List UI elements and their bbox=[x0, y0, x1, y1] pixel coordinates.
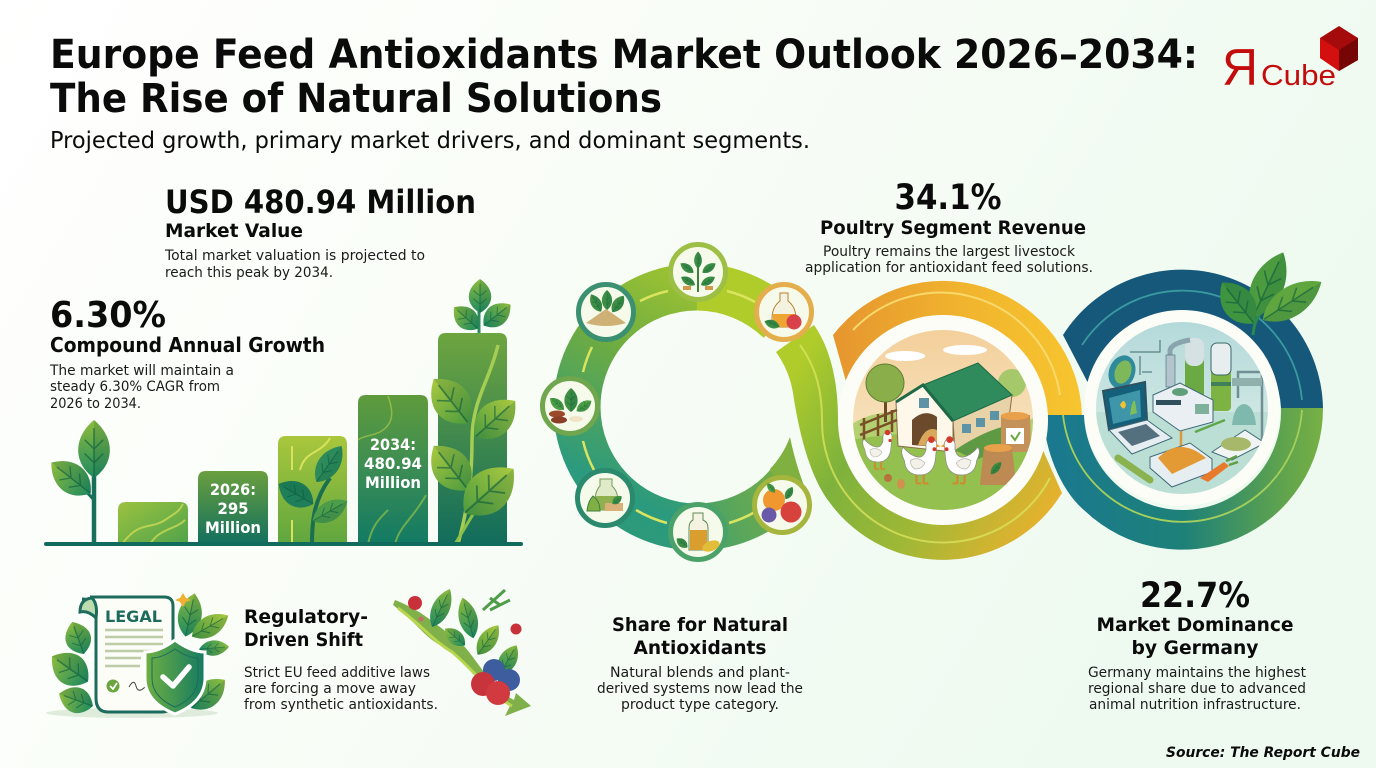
stat: CAGR: The market will maintain a bbox=[49, 363, 234, 379]
band: teal lower arc bbox=[1043, 408, 1323, 550]
bar chart: market growth bbox=[42, 279, 528, 546]
source note: Source: The Report Cube bbox=[1166, 745, 1360, 761]
icon node: fruits bbox=[754, 478, 810, 532]
bar 2034: 2034: bbox=[370, 435, 416, 454]
text: natural antioxidants share: derived systems now lead the bbox=[597, 681, 803, 697]
stat: CAGR: steady 6.30% CAGR from bbox=[50, 379, 220, 395]
icon node: herb top bbox=[670, 244, 726, 300]
text: regulatory shift: Driven Shift bbox=[244, 629, 363, 651]
text: natural antioxidants share: Natural blends and plant- bbox=[610, 665, 790, 681]
stat: Germany: 22.7% bbox=[1140, 576, 1250, 616]
illustration: poultry farm bbox=[853, 330, 1033, 510]
bar 2026: 295 bbox=[218, 499, 248, 518]
logo: RCube bbox=[1222, 26, 1358, 97]
icon: natural shift arrow with berries bbox=[393, 585, 531, 716]
band: dark blue arc bbox=[1063, 270, 1323, 408]
stat: CAGR: Compound Annual Growth bbox=[50, 333, 325, 357]
stat: market value: USD 480.94 Million bbox=[165, 183, 476, 221]
title: The Rise of Natural Solutions bbox=[50, 76, 662, 122]
stat: poultry: Poultry remains the largest livestock bbox=[823, 244, 1076, 260]
icon node: leaves and nuts bbox=[542, 378, 598, 434]
bar 2026: 2026: bbox=[210, 480, 256, 499]
text: natural antioxidants share: product type category. bbox=[621, 697, 779, 713]
icon: leaves on blue ring bbox=[1210, 246, 1329, 335]
bar 3 bbox=[273, 436, 352, 544]
text: natural antioxidants share bbox=[597, 614, 803, 713]
icon node: powder and leaves bbox=[578, 284, 634, 340]
stat: market value: reach this peak by 2034. bbox=[165, 265, 333, 281]
subtitle: Projected growth, primary market drivers, and dominant segments. bbox=[50, 128, 810, 154]
stat: market value: Total market valuation is projected to bbox=[164, 248, 425, 264]
band: S curve into poultry bbox=[776, 325, 1062, 560]
stat: poultry: application for antioxidant feed solutions. bbox=[805, 260, 1093, 276]
text: regulatory shift: are forcing a move away bbox=[244, 681, 416, 697]
text: regulatory shift: Strict EU feed additive laws bbox=[244, 665, 430, 681]
stat: CAGR: 2026 to 2034. bbox=[50, 396, 141, 412]
stat: Germany: Germany maintains the highest bbox=[1088, 665, 1306, 681]
text: natural antioxidants share: Antioxidants bbox=[634, 637, 766, 659]
illustration: feed lab bbox=[1096, 322, 1268, 494]
icon: legal document with shield bbox=[43, 591, 233, 718]
bar 2034: 480.94 bbox=[364, 454, 422, 473]
infinity loop diagram bbox=[577, 246, 1329, 560]
stat: CAGR: 6.30% bbox=[50, 295, 166, 336]
stat: Germany bbox=[1088, 576, 1306, 713]
icon node: oil and fruit bbox=[756, 284, 812, 340]
stat: Germany: regional share due to advanced bbox=[1088, 681, 1306, 697]
ring: natural antioxidants bbox=[577, 287, 812, 527]
white disc lab bbox=[1084, 310, 1280, 506]
title bbox=[50, 32, 1198, 122]
text: regulatory shift: Regulatory- bbox=[244, 606, 368, 628]
bar 2034: Million bbox=[365, 473, 421, 492]
stat: Germany: Market Dominance bbox=[1096, 614, 1294, 636]
icon: sprout left bbox=[42, 420, 110, 544]
white disc poultry bbox=[838, 315, 1048, 525]
stat: poultry: 34.1% bbox=[894, 178, 1002, 218]
stat: poultry: Poultry Segment Revenue bbox=[820, 217, 1086, 239]
band: yellow poultry arc bbox=[833, 281, 1082, 415]
stat: Germany: by Germany bbox=[1132, 637, 1259, 659]
bar 2026: Million bbox=[205, 518, 261, 537]
bar 1 bbox=[118, 502, 188, 544]
stat: market value bbox=[164, 183, 476, 281]
stat: CAGR bbox=[49, 295, 325, 412]
bar 2034 bbox=[358, 395, 428, 544]
stat: market value: Market Value bbox=[165, 220, 303, 242]
title: Europe Feed Antioxidants Market Outlook 2026–2034: bbox=[50, 32, 1198, 78]
chart baseline bbox=[44, 542, 523, 546]
text: regulatory shift bbox=[244, 606, 438, 713]
stat: Germany: animal nutrition infrastructure. bbox=[1089, 697, 1301, 713]
icon node: flask bottom left bbox=[578, 470, 632, 526]
icon node: bottle bottom bbox=[670, 504, 726, 560]
bar 2026 bbox=[198, 471, 268, 544]
text: natural antioxidants share: Share for Natural bbox=[612, 614, 788, 636]
stat: poultry bbox=[805, 178, 1093, 276]
text: regulatory shift: from synthetic antioxidants. bbox=[244, 697, 438, 713]
bar 2034 plant bbox=[419, 279, 528, 544]
icon: legal document with shield: LEGAL bbox=[105, 607, 162, 626]
logo: RCube: Я bbox=[1222, 39, 1258, 97]
logo: RCube: Cube bbox=[1261, 60, 1336, 92]
